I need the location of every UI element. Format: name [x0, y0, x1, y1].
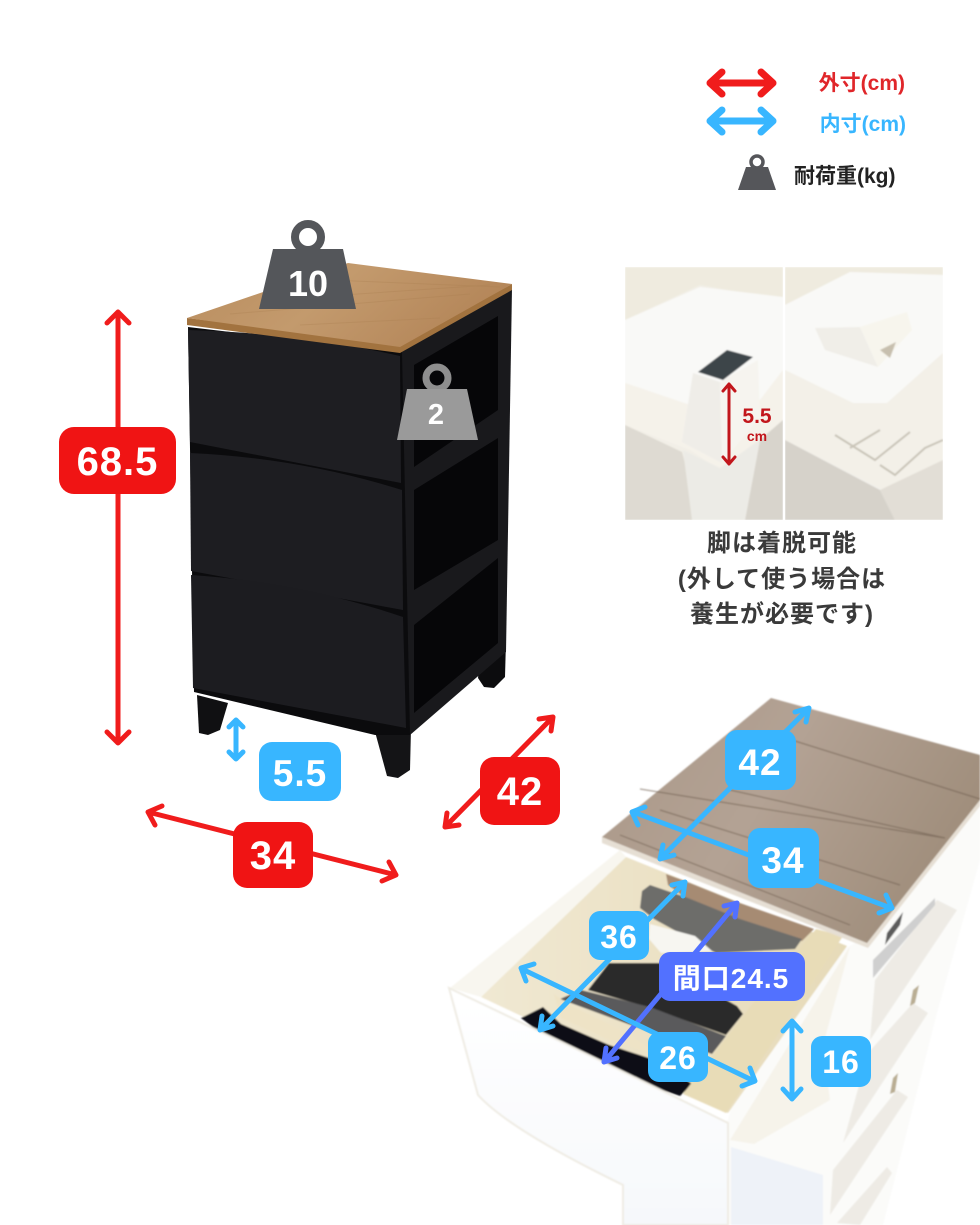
inner dimension: drawer width 26 [521, 964, 755, 1086]
label: 34: 34 [761, 840, 805, 881]
clothes: brown sweater [666, 874, 814, 941]
label: 42: 42 [738, 742, 782, 783]
value: 2: 2 [428, 399, 444, 431]
photo left: leg attached [625, 267, 783, 520]
black drawer chest photo [187, 263, 512, 778]
clothes: mid grey folded [560, 990, 726, 1054]
label: 26 [648, 1032, 708, 1082]
lower chest panels [830, 900, 957, 1225]
caption line 2: (外して使う場合は [678, 566, 886, 593]
clothes: navy folded [521, 1007, 692, 1096]
legend: outer size arrow [710, 72, 773, 94]
left lower block [623, 1185, 728, 1225]
wood top edge [187, 284, 512, 353]
drawer front panel [449, 988, 728, 1225]
inner dimension: top width 34 [632, 807, 892, 913]
oak grain [620, 741, 980, 925]
right fabric divider [683, 929, 843, 1113]
label: 5.5: 5.5 [273, 753, 327, 794]
label: 34: 34 [250, 834, 296, 878]
side window [873, 898, 935, 978]
open drawer interior [481, 857, 847, 1113]
top drawer [188, 330, 401, 483]
leg height value: cm [747, 428, 767, 444]
label: 42: 42 [497, 770, 543, 814]
wood top board [187, 263, 512, 347]
legend [710, 72, 906, 190]
photo: removable leg [625, 267, 943, 520]
inner dimension: top depth 42 [660, 708, 809, 859]
side frame [400, 288, 512, 735]
drawer near rim [450, 850, 626, 997]
fabric divider fold [554, 994, 647, 1052]
drawer side wall [730, 946, 850, 1144]
legend: load weight icon [738, 156, 776, 190]
caption: legs are removable [678, 530, 886, 628]
clothes: dark folded [588, 963, 743, 1035]
clothes: white shirt [649, 924, 712, 953]
label: opening 24.5: 間口24.5 [673, 963, 789, 994]
side latch [885, 912, 903, 945]
leg height value [743, 408, 771, 441]
label: 36 [589, 911, 649, 960]
inner dimension: opening depth 24.5 [604, 903, 805, 1062]
side openings [414, 316, 498, 713]
legend: load capacity label: 耐荷重(kg) [794, 165, 896, 188]
joint shadows [890, 985, 919, 1094]
bottom drawer [191, 575, 406, 728]
label: opening 24.5 [659, 952, 805, 1001]
label: 34 [233, 822, 313, 888]
oak top board edge [602, 800, 980, 948]
middle drawer [190, 453, 403, 610]
wood grain [230, 280, 500, 325]
label: 16: 16 [822, 1044, 860, 1080]
dimension: height 68.5 [59, 312, 176, 743]
label: 42 [725, 730, 796, 790]
weight icon: drawer 2 kg [397, 367, 478, 440]
label: 68.5 [59, 427, 176, 494]
chest side silhouette [623, 800, 980, 1225]
inner dimension: drawer depth 36 [540, 882, 685, 1030]
white drawer chest photo [449, 698, 980, 1225]
front body [188, 327, 410, 735]
caption line 3: 養生が必要です) [690, 600, 874, 628]
value: 10: 10 [288, 263, 328, 304]
leg height value: 5.5 [742, 405, 772, 428]
lower drawer front [731, 1147, 823, 1225]
weight icon: top board 10 kg [259, 224, 356, 309]
legend: inner size label: 内寸(cm) [820, 113, 906, 136]
label: 36: 36 [600, 919, 638, 955]
clothes: grey top [640, 885, 802, 953]
legend: outer size label: 外寸(cm) [819, 72, 905, 95]
label: 68.5: 68.5 [77, 440, 158, 484]
label: 34 [748, 828, 819, 888]
left leg [197, 695, 228, 735]
legend: inner size arrow [710, 110, 773, 132]
dimension: width 34 [148, 806, 396, 888]
dimension: depth 42 [445, 717, 560, 827]
front leg [374, 728, 411, 778]
photo right: leg detached [785, 267, 943, 520]
back leg [478, 640, 506, 688]
inner dimension: drawer height 16 [783, 1021, 871, 1099]
label: 26: 26 [659, 1040, 697, 1076]
caption line 1: 脚は着脱可能 [707, 530, 857, 557]
leg height arrow [723, 384, 735, 464]
dimension: leg height 5.5 [229, 720, 341, 801]
oak top board [602, 698, 980, 943]
